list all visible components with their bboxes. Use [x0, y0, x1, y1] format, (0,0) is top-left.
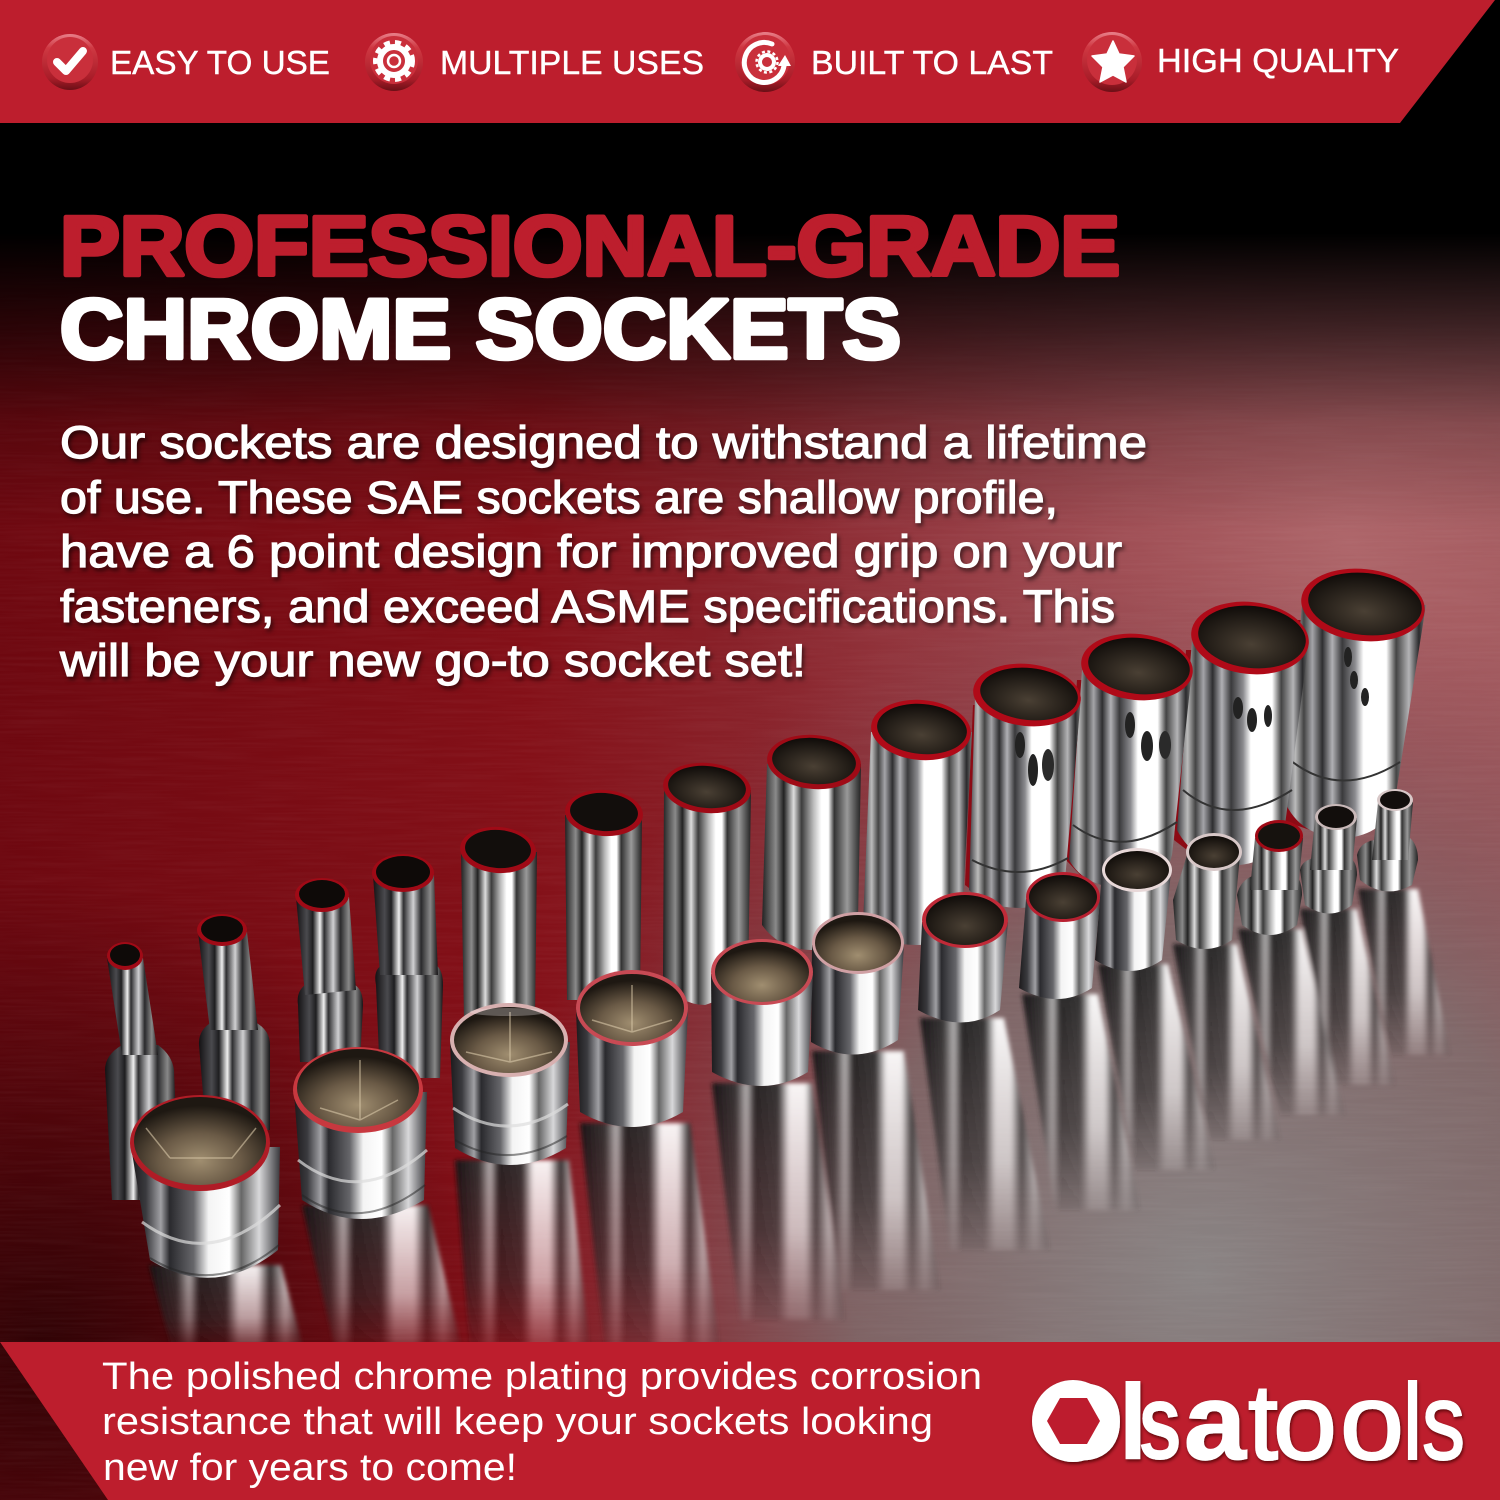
front row of short sockets: [130, 789, 1418, 1278]
socket 1: [105, 942, 176, 1200]
title: [60, 199, 1120, 376]
front socket 12: [1300, 804, 1357, 914]
logo: Olsatools: t: [1248, 1361, 1278, 1482]
socket 12: [1174, 596, 1312, 865]
socket 9: [863, 696, 973, 945]
socket 2: [197, 914, 270, 1130]
footer text: new for years to come!: [103, 1447, 517, 1489]
footer text: resistance that will keep your sockets looking: [102, 1401, 933, 1443]
socket 3: [295, 878, 363, 1062]
logo: Olsatools: a: [1184, 1361, 1247, 1482]
logo: Olsatools: l: [1403, 1361, 1422, 1482]
title: CHROME SOCKETS: [60, 282, 901, 376]
bottom banner: [0, 1342, 1500, 1500]
socket reflections on the surface: [149, 889, 1450, 1350]
socket 6: [563, 787, 645, 1000]
front socket 11: [1237, 820, 1303, 935]
socket 5: [458, 824, 538, 1020]
body text block: of use. These SAE sockets are shallow profile,: [60, 472, 1058, 523]
badge: easy to use: [42, 34, 98, 90]
back row of tall sockets: [105, 563, 1428, 1200]
front socket 4: [576, 970, 688, 1127]
badge: multiple uses: [365, 33, 423, 91]
front socket 10: [1173, 833, 1242, 949]
footer text: [102, 1356, 982, 1489]
logo: Olsatools: O: [1040, 1361, 1124, 1482]
badge: high quality: [1082, 32, 1142, 92]
socket 11: [1066, 628, 1196, 888]
socket 4: [372, 854, 443, 1078]
logo: Olsatools: s: [1138, 1361, 1182, 1482]
body text block: fasteners, and exceed ASME specifications. This: [60, 581, 1115, 632]
front socket 2: [293, 1047, 427, 1219]
badge: built to last: [735, 32, 795, 92]
body text block: have a 6 point design for improved grip on your: [60, 526, 1122, 577]
socket 8: [762, 731, 863, 950]
body text block: will be your new go-to socket set!: [59, 635, 806, 686]
front socket 7: [918, 892, 1008, 1022]
front socket 13: [1357, 789, 1418, 891]
footer text: The polished chrome plating provides corrosion: [102, 1356, 982, 1398]
front socket 8: [1019, 872, 1100, 999]
label: multiple uses: MULTIPLE USES: [440, 44, 704, 81]
front socket 9: [1095, 848, 1172, 971]
front socket 5: [711, 939, 813, 1086]
logo: Olsatools: s: [1422, 1361, 1465, 1482]
top banner: [0, 0, 1495, 123]
socket 13: [1281, 563, 1428, 838]
logo: Olsatools: o: [1273, 1361, 1337, 1482]
front socket 1: [130, 1095, 280, 1278]
socket 10: [965, 659, 1084, 908]
label: high quality: HIGH QUALITY: [1157, 42, 1399, 79]
label: easy to use: EASY TO USE: [110, 44, 330, 81]
logo: Olsatools: l: [1118, 1361, 1148, 1482]
logo: Olsatools: [1032, 1361, 1465, 1482]
logo: Olsatools: o: [1340, 1361, 1404, 1482]
front socket 3: [450, 1003, 570, 1165]
front socket 6: [811, 912, 904, 1055]
body text block: [59, 417, 1147, 686]
title: PROFESSIONAL-GRADE: [60, 199, 1120, 293]
socket 7: [661, 759, 753, 1005]
label: built to last: BUILT TO LAST: [811, 44, 1053, 81]
body text block: Our sockets are designed to withstand a lifetime: [60, 417, 1147, 468]
